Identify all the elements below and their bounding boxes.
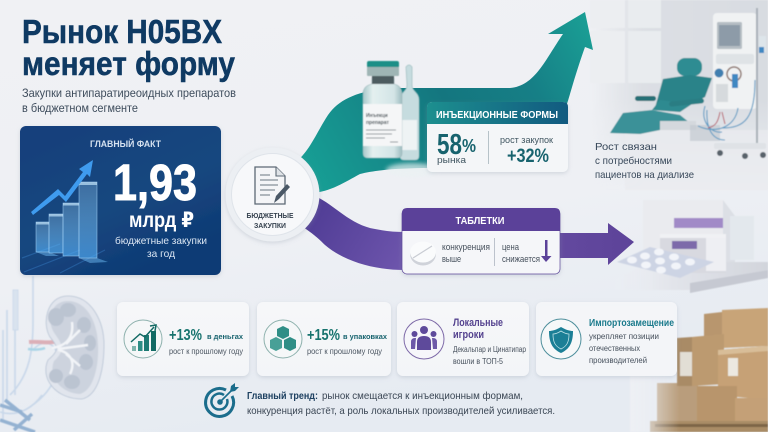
- panel: injectable forms: ИНЪЕКЦИОННЫЕ ФОРМЫ: [436, 109, 558, 121]
- icon: growth bars: [124, 320, 162, 358]
- vial: [363, 61, 402, 158]
- photo: medicine boxes on shelf: [610, 200, 768, 293]
- label: main fact: ГЛАВНЫЙ ФАКТ: [90, 138, 161, 150]
- icon: tablet: [410, 242, 436, 266]
- card text: укрепляет позиции: [589, 331, 659, 341]
- description: за год: [147, 248, 175, 260]
- panel: tablets: [402, 208, 560, 274]
- purple ribbon: [303, 196, 405, 270]
- panel header: [427, 102, 568, 124]
- card text: Импортозамещение: [589, 317, 674, 329]
- stat text: +13%: [169, 327, 202, 344]
- icon: target with arrow: [206, 383, 239, 416]
- photo: kidney and tubing: [0, 276, 104, 432]
- vial: препарат: [366, 120, 389, 126]
- tubing: [0, 276, 58, 432]
- photo: dialysis room: [580, 0, 768, 190]
- stat: purchase growth: рост закупок: [500, 135, 554, 146]
- main trend text: [247, 390, 555, 417]
- stat card: local players: [397, 302, 529, 376]
- text: price: [502, 242, 540, 264]
- title: Рынок H05BX: [22, 13, 222, 50]
- description: бюджетные закупки: [115, 235, 207, 247]
- stat: purchase growth: +32%: [507, 146, 549, 167]
- stat text: рост к прошлому году: [169, 347, 243, 356]
- text: price: цена: [502, 242, 520, 252]
- dialysis machine: [698, 8, 766, 159]
- teal ribbon arrow: [298, 12, 593, 193]
- caption: dialysis: с потребностями: [595, 155, 672, 167]
- vial: Инъекци: [366, 113, 388, 119]
- caption: dialysis: Рост связан: [595, 141, 657, 153]
- stat card: import substitution: [536, 302, 677, 376]
- stat text: рост к прошлому году: [307, 347, 382, 356]
- card text: Декальпар и Цинатипар: [453, 345, 526, 354]
- panel header: [402, 208, 560, 231]
- stat: 58 percent of market: рынка: [437, 155, 467, 166]
- card text: [589, 317, 674, 365]
- caption: dialysis: пациентов на диализе: [595, 169, 694, 181]
- text: competition: выше: [442, 254, 461, 264]
- caption: dialysis: [595, 141, 694, 181]
- purple arrow: [555, 223, 634, 265]
- stat text: [307, 327, 388, 356]
- card text: игроки: [453, 329, 484, 341]
- kidney: [46, 296, 104, 399]
- stat text: +15%: [307, 327, 340, 344]
- icon: stacked cubes: [264, 320, 302, 358]
- subtitle: [22, 86, 236, 115]
- stat: purchase growth: [500, 135, 554, 167]
- icon: shield: [541, 319, 581, 359]
- stat: 58 percent of market: %: [462, 136, 476, 156]
- icon: rising bar chart: [22, 160, 108, 273]
- card text: [453, 317, 526, 366]
- card text: Локальные: [453, 317, 503, 329]
- arrow: price down: [541, 240, 552, 262]
- card text: производителей: [589, 355, 647, 365]
- panel: tablets: ТАБЛЕТКИ: [456, 215, 504, 227]
- stat: 58 percent of market: 58: [437, 129, 462, 161]
- panel: main fact: [20, 126, 221, 275]
- main trend text: Главный тренд:: [247, 390, 318, 402]
- text: competition: конкуренция: [442, 242, 490, 252]
- illustration: vial and ampoule: [363, 61, 419, 160]
- stat card: money growth: [117, 302, 249, 376]
- text: price: снижается: [502, 254, 540, 264]
- photo: cardboard boxes on pallets: [630, 308, 768, 432]
- card text: отечественных: [589, 343, 641, 353]
- chair: [610, 58, 720, 141]
- circle label: [246, 211, 294, 230]
- text: competition: [442, 242, 490, 264]
- title: [22, 13, 236, 82]
- stat text: в деньгах: [207, 332, 244, 341]
- icon: document with pen: [255, 167, 290, 204]
- title: меняет форму: [22, 45, 236, 82]
- panel: injectable forms: [427, 102, 568, 172]
- circle label: БЮДЖЕТНЫЕ: [246, 211, 294, 220]
- subtitle: Закупки антипаратиреоидных препаратов: [22, 86, 236, 100]
- stat text: [169, 327, 244, 356]
- main trend text: рынок смещается к инъекционным формам,: [322, 390, 523, 402]
- unit: млрд ₽: [129, 209, 194, 232]
- central circle: budget procurement: [226, 148, 320, 242]
- main trend text: конкуренция растёт, а роль локальных производителей усиливается.: [247, 405, 555, 417]
- subtitle: в бюджетном сегменте: [22, 101, 138, 115]
- ampoule: [400, 65, 419, 160]
- circle label: ЗАКУПКИ: [254, 221, 286, 230]
- card text: вошли в ТОП-5: [453, 357, 503, 366]
- stat text: в упаковках: [343, 332, 388, 341]
- stat card: package growth: [257, 302, 391, 376]
- description: [115, 235, 207, 260]
- icon: people: [404, 319, 444, 359]
- big number: 1,93: [113, 154, 197, 211]
